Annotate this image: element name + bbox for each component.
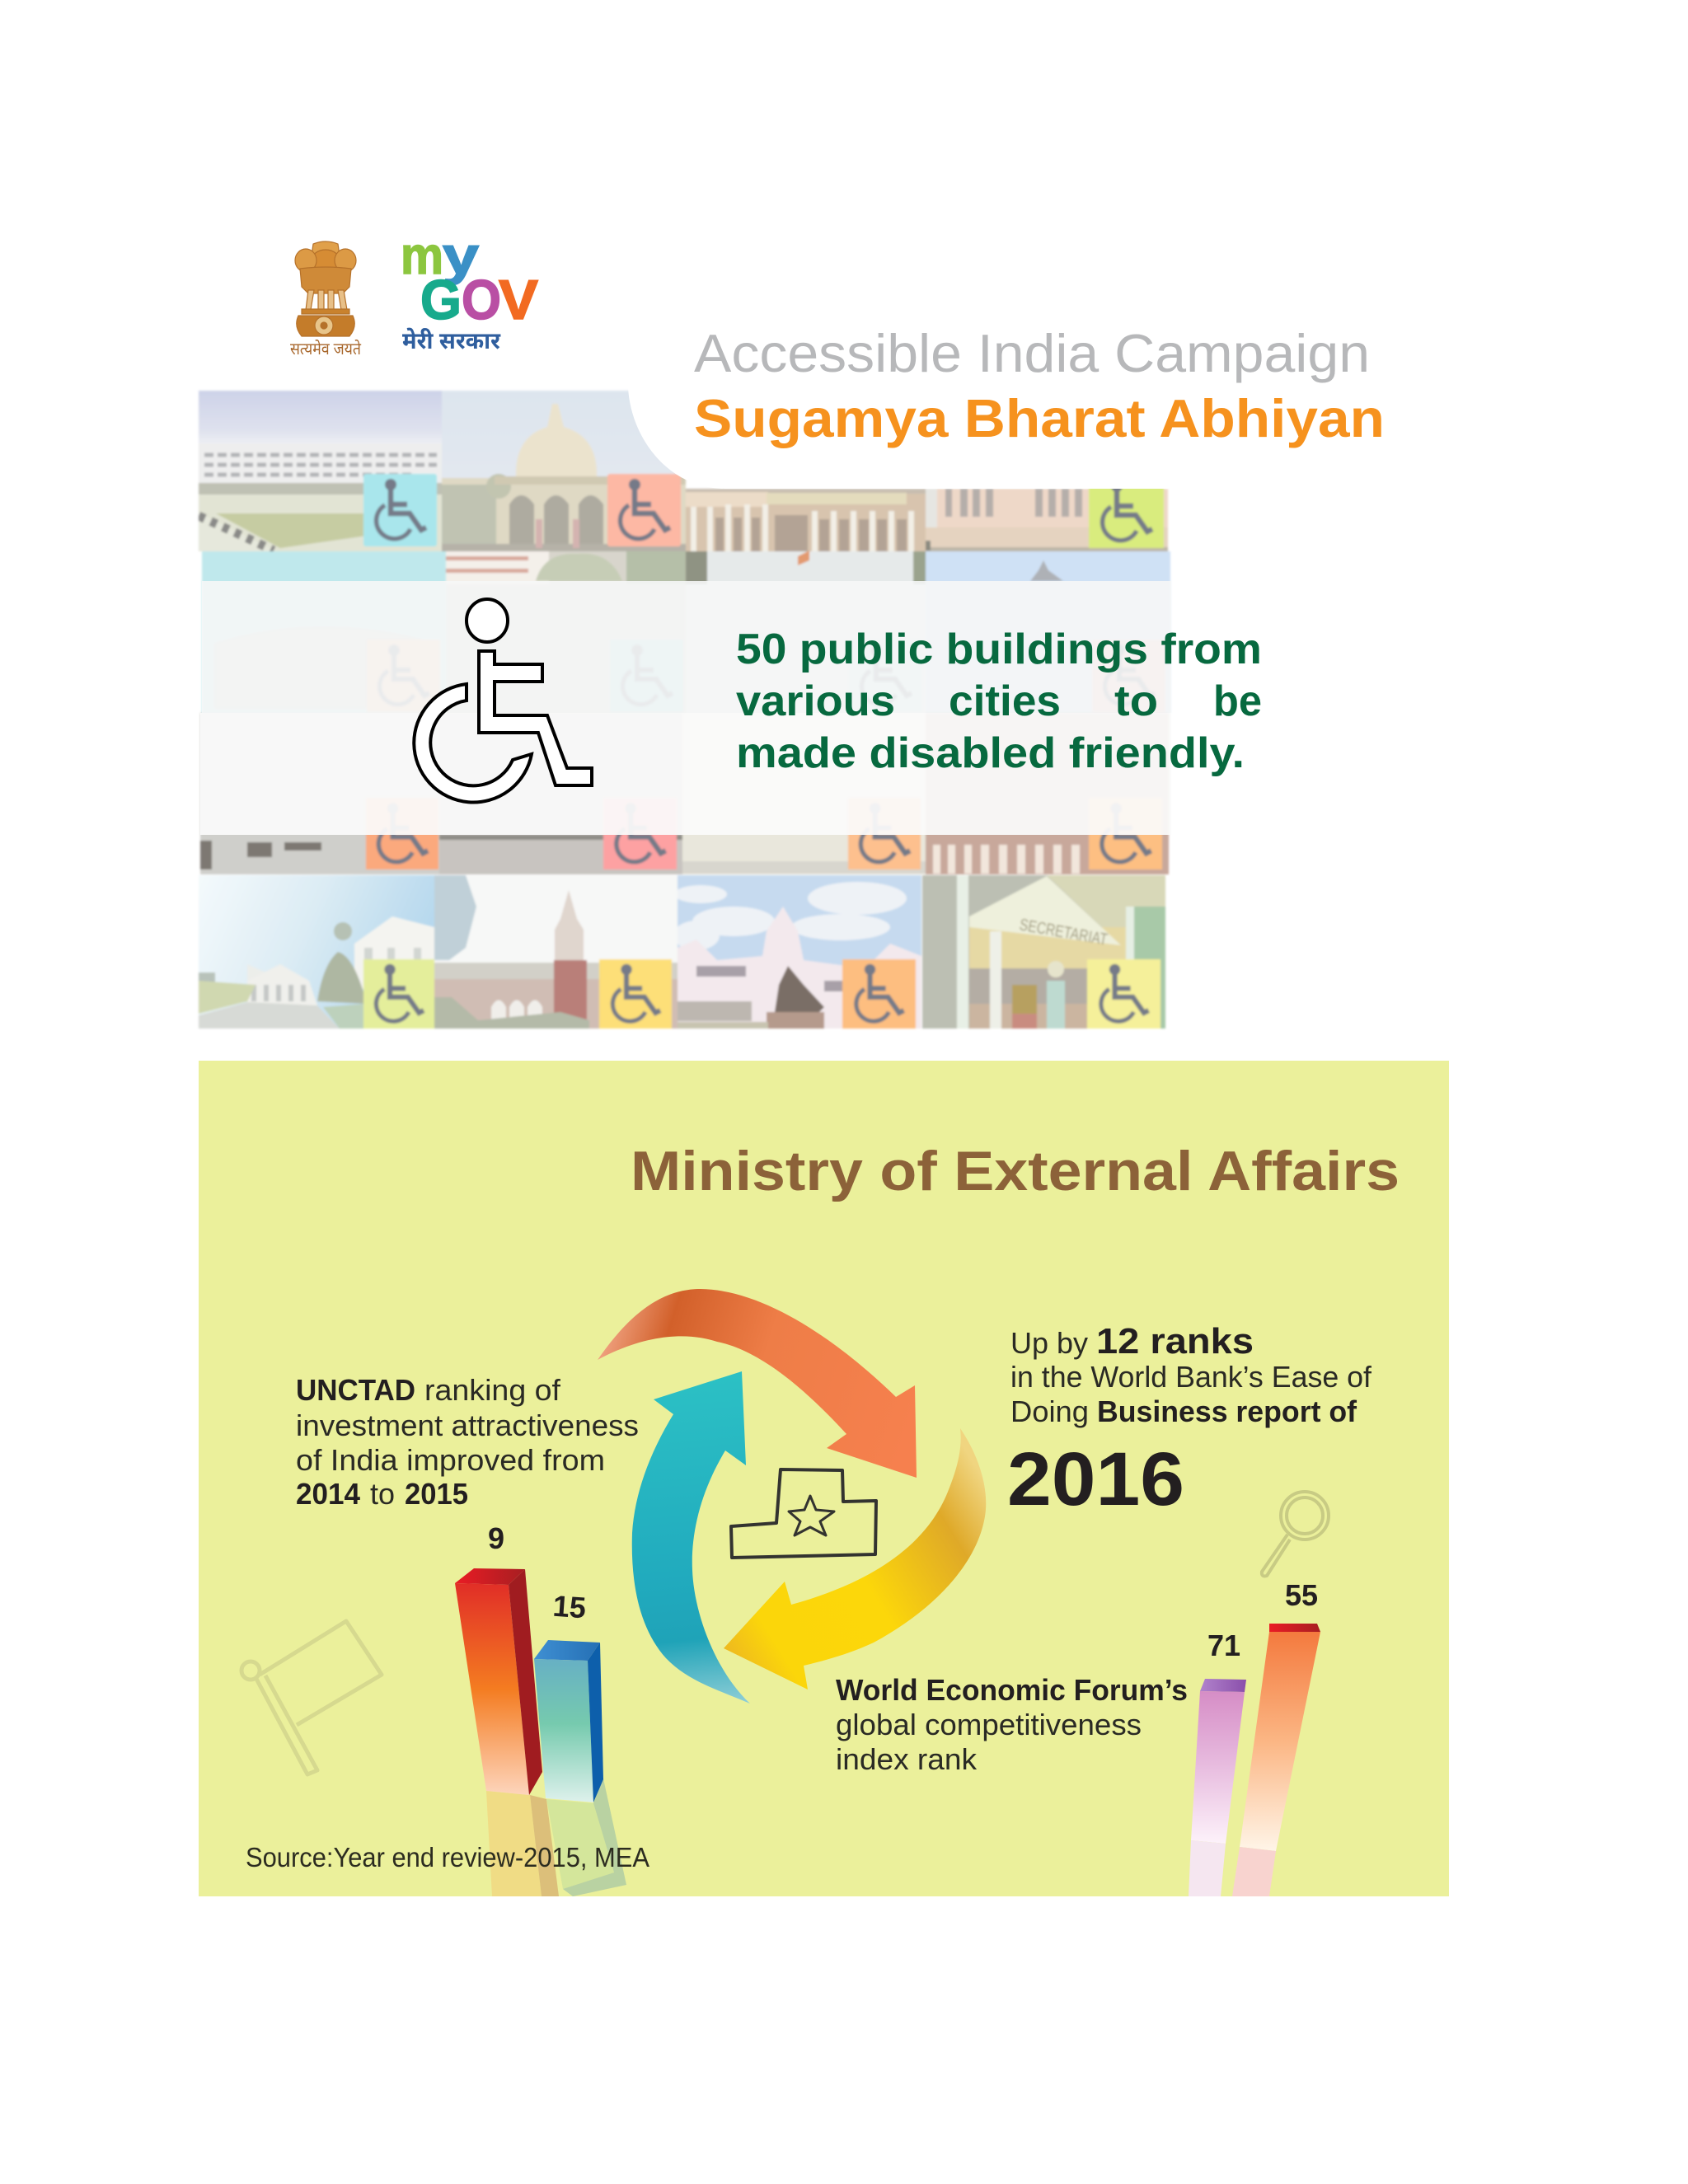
row 4 photos [199,875,1165,1029]
myGov tagline: मेरी सरकार [402,326,501,354]
photo collage of public buildings [199,387,1236,1029]
subtitle: Sugamya Bharat Abhiyan [694,388,1385,448]
text block: UNCTAD [296,1373,639,1511]
text block: 50 public buildings: various [736,677,895,725]
text block: UNCTAD: UNCTAD [296,1373,415,1407]
myGov logo: O [462,269,501,331]
chart: World Economic Forum bars [1189,1578,1320,1896]
myGov logo: y [443,226,480,285]
icon: flag [241,1621,382,1774]
text block: UNCTAD: investment attractiveness [296,1408,639,1442]
secretariat sign: SECRETARIAT [1018,916,1109,949]
text block: UNCTAD: of India improved from [296,1443,605,1477]
bar: 2014 value 9 [455,1568,542,1795]
arrow: yellow [724,1428,986,1690]
myGov logo: V [499,269,538,331]
myGov logo: m [401,226,443,285]
chart: UNCTAD bars [455,1521,626,1896]
title: Accessible India Campaign [694,323,1370,383]
myGov logo: G [420,269,462,331]
row 3 photos [200,713,1169,874]
text block: Up by 12 ranks: Doing [1010,1394,1089,1428]
text block: World Economic Forum [836,1673,1188,1776]
value label 9: 9 [488,1521,504,1555]
bar: value 71 [1189,1679,1246,1896]
heading: Ministry of External Affairs [631,1140,1400,1202]
text block: Up by 12 ranks: in the World Bank’s Ease of [1010,1360,1372,1394]
panel: Ministry of External Affairs [199,1061,1449,1896]
bar: 2015 value 15 [534,1640,603,1802]
text block: Up by 12 ranks [1007,1321,1372,1521]
text block: Up by 12 ranks: 12 ranks [1096,1321,1254,1361]
text block: 50 public buildings: to [1114,677,1158,725]
text block: Up by 12 ranks: Business report of [1097,1394,1357,1428]
text block: World Economic Forum: index rank [836,1742,978,1776]
myGov logo [401,226,538,354]
arrow: teal [632,1371,750,1704]
text block: Up by 12 ranks: Up by [1010,1326,1088,1360]
text block: UNCTAD: to [370,1477,395,1511]
icon: wheelchair outline [414,599,592,803]
value label 15: 15 [551,1589,587,1624]
arrow: orange [598,1289,917,1478]
text block: World Economic Forum: global competitiveness [836,1708,1142,1741]
text block: 50 public buildings: made disabled friendly. [736,729,1245,777]
bar reflections [486,1779,626,1896]
text block: 50 public buildings [736,626,1262,777]
year 2016: 2016 [1007,1437,1184,1521]
icon: magnifying glass [1262,1492,1329,1576]
row 1 signs [363,474,1164,548]
text block: 50 public buildings: 50 public buildings from [736,626,1262,673]
text block: 50 public buildings: cities [949,677,1061,725]
value label 71: 71 [1207,1629,1240,1662]
white title cut-out [628,387,1236,489]
source note: Source:Year end review-2015, MEA [246,1842,649,1872]
emblem motto: सत्यमेव जयते [290,339,362,359]
row 1 photos [199,391,1168,551]
text block: UNCTAD: 2014 [296,1477,360,1511]
text block: UNCTAD: 2015 [405,1477,468,1511]
icon: podium with star [731,1469,876,1558]
title [694,323,1385,448]
translucent white band [200,581,1171,835]
emblem of India [290,241,362,359]
text block: UNCTAD: ranking of [424,1373,561,1407]
text block: 50 public buildings: be [1213,677,1262,725]
bar: value 55 [1232,1624,1320,1896]
row 2 photos [202,551,1170,713]
value label 55: 55 [1285,1578,1318,1612]
text block: World Economic Forum: World Economic Forum’s [836,1673,1188,1707]
